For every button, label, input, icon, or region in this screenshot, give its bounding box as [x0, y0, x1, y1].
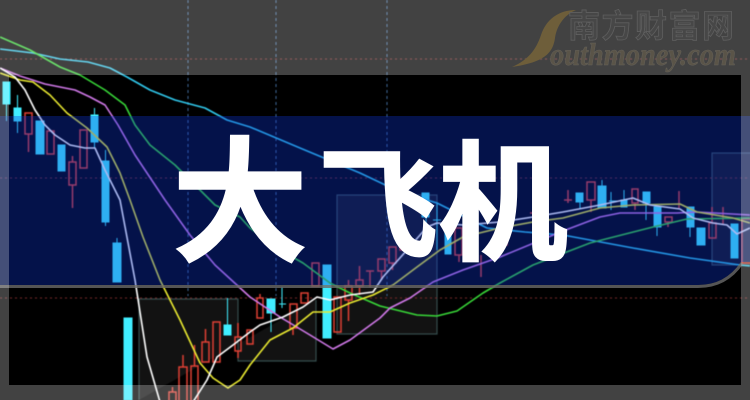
watermark: Southmoney logo — [512, 1, 736, 72]
red rising candles — [25, 113, 750, 400]
yellow moving average — [0, 73, 750, 388]
green moving average — [0, 37, 750, 316]
title: 大 — [172, 128, 308, 280]
cyan falling candles — [3, 82, 738, 400]
purple moving average — [0, 68, 750, 349]
watermark Chinese name: 南方财富网 — [568, 1, 734, 47]
shaded consolidation boxes — [139, 153, 750, 400]
icon: gold swoosh — [512, 10, 576, 67]
title: 机 — [438, 132, 568, 278]
title: 飞 — [318, 140, 438, 274]
blue moving average — [0, 49, 750, 266]
title — [172, 128, 568, 280]
panel: navy title band — [0, 116, 750, 286]
